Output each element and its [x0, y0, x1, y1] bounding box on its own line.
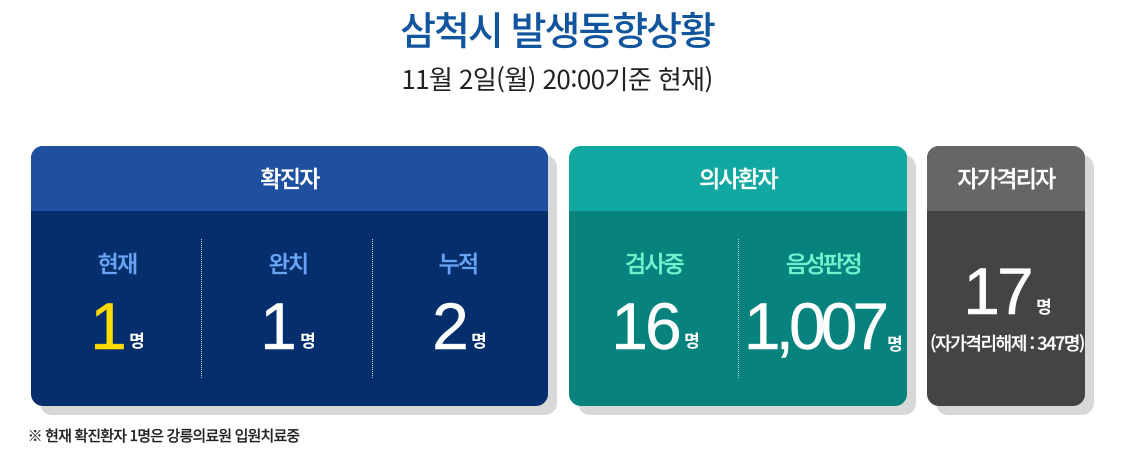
label: cumulative: 누적	[439, 245, 477, 279]
footnote: ※ 현재 확진환자 1명은 강릉의료원 입원치료중	[28, 425, 299, 446]
unit: 명	[471, 327, 487, 352]
unit: 명	[129, 327, 145, 352]
label: negative: 음성판정	[786, 245, 860, 279]
panel: self-quarantine	[927, 146, 1085, 406]
subtitle: date and time: 11월 2일(월) 20:00기준 현재)	[401, 60, 713, 97]
label: current: 현재	[98, 245, 136, 279]
panel: confirmed	[31, 146, 548, 406]
number: cumulative: 2	[432, 289, 466, 363]
unit: 명	[300, 327, 316, 352]
label: recovered: 완치	[269, 245, 307, 279]
number: negative: 1,007	[744, 289, 884, 363]
number: current: 1	[90, 289, 124, 363]
panel: suspected	[569, 146, 907, 406]
number: testing: 16	[611, 289, 679, 363]
heading: suspected: 의사환자	[699, 160, 777, 194]
number: recovered: 1	[260, 289, 294, 363]
heading: self-quarantine: 자가격리자	[957, 160, 1055, 194]
unit: 명	[887, 330, 903, 355]
heading: confirmed	[31, 146, 548, 211]
heading: self-quarantine	[927, 146, 1085, 211]
heading: confirmed: 확진자	[260, 160, 319, 194]
title: 삼척시 발생동향상황	[400, 1, 714, 57]
heading: suspected	[569, 146, 907, 211]
label: testing: 검사중	[625, 245, 683, 279]
unit: 명	[1036, 293, 1052, 318]
number: quarantine: 17	[963, 254, 1031, 328]
unit: 명	[684, 327, 700, 352]
note: quarantine released: (자가격리해제 : 347명)	[930, 330, 1084, 356]
